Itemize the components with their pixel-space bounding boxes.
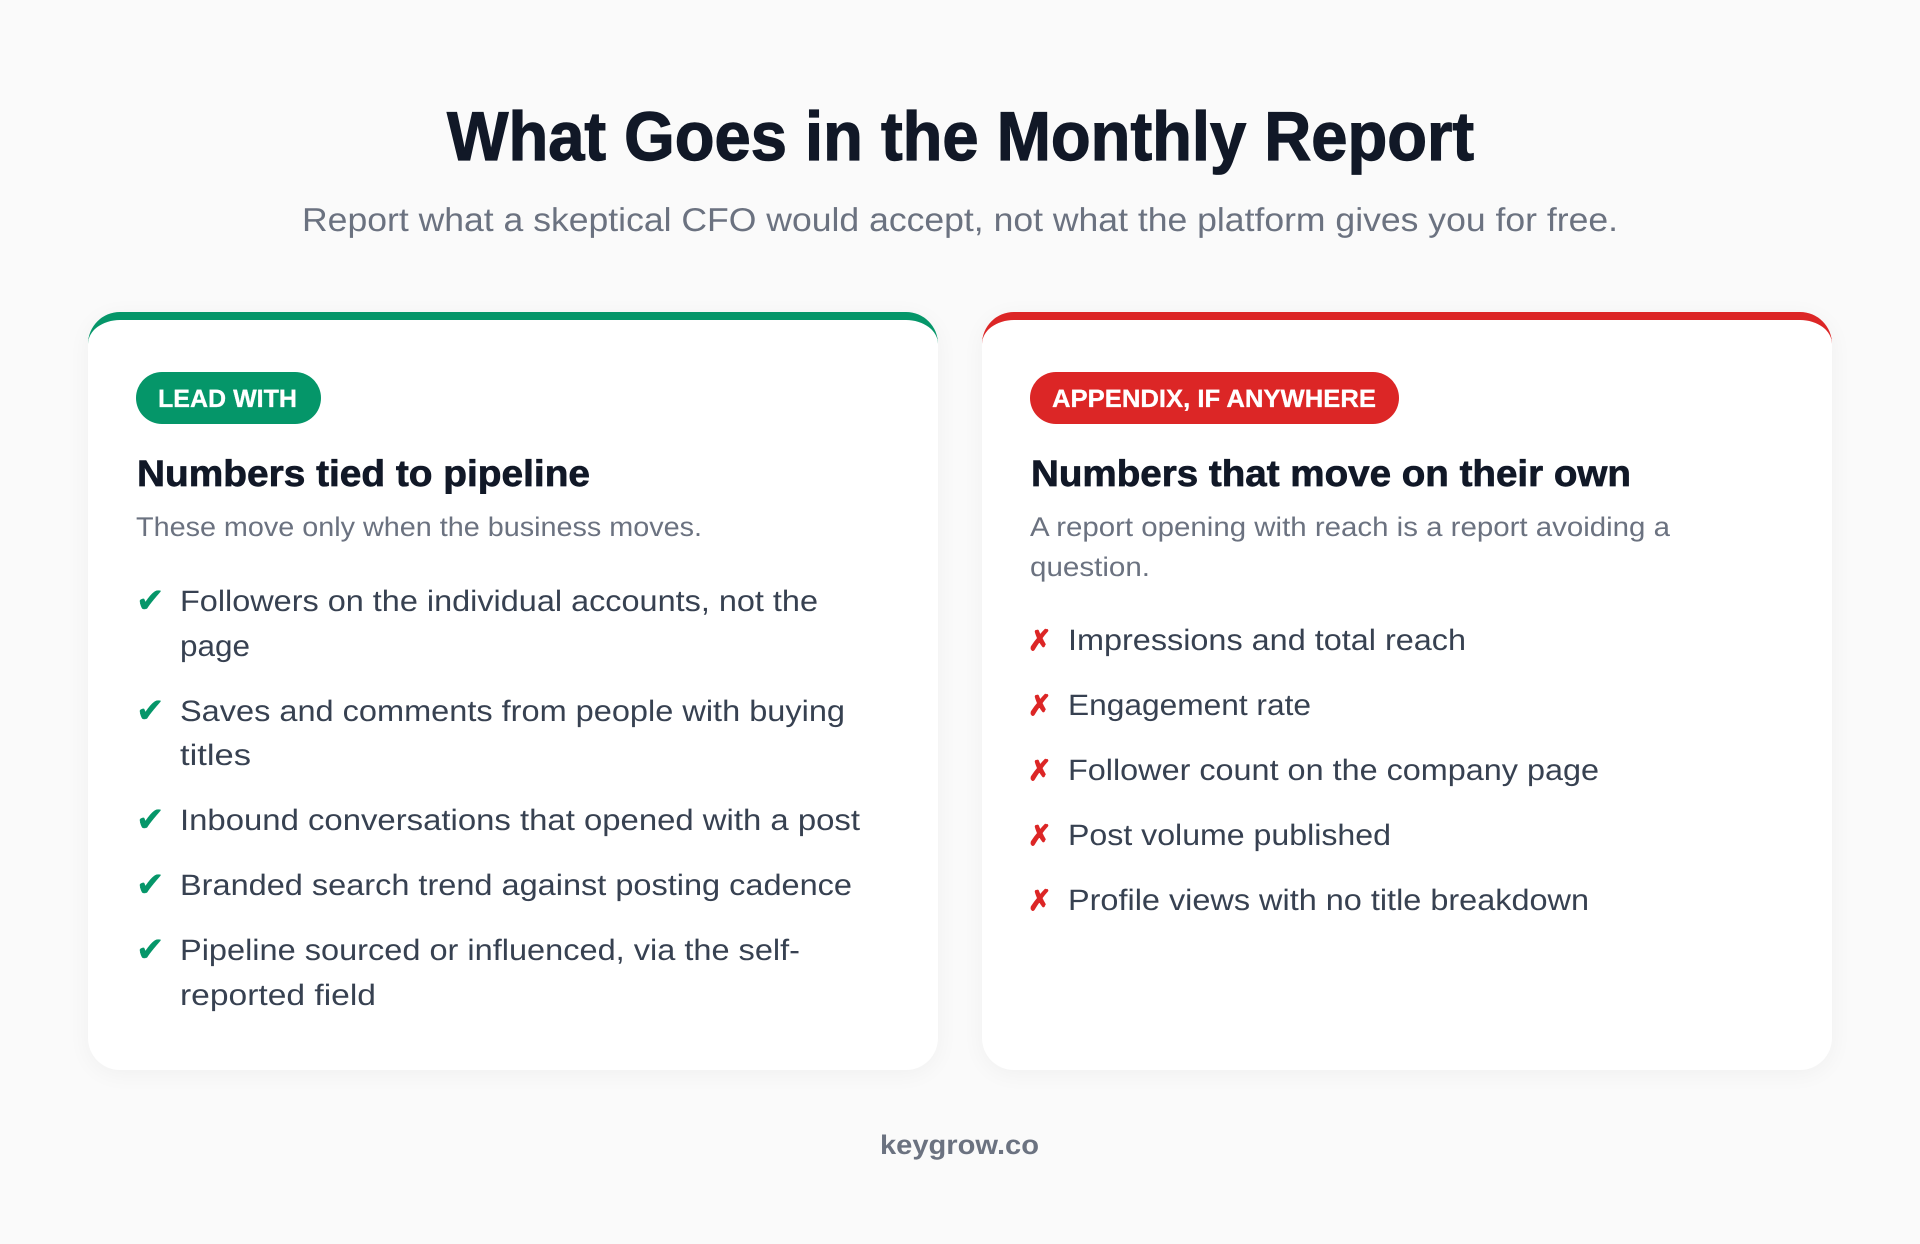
heading: numbers tied to pipeline: Numbers tied to pipeline xyxy=(137,453,590,494)
item: saves and comments xyxy=(136,691,845,772)
description xyxy=(1030,512,1671,582)
item: inbound conversations xyxy=(136,800,860,840)
item: engagement rate: Engagement rate xyxy=(1068,689,1311,722)
heading: numbers that move on their own: Numbers that move on their own xyxy=(1031,453,1631,494)
item: follower count: Follower count on the company page xyxy=(1068,754,1599,787)
item: pipeline sourced xyxy=(136,930,800,1012)
item: post volume: Post volume published xyxy=(1068,819,1391,852)
checklist xyxy=(136,581,860,1012)
item: branded search trend: Branded search trend against posting cadence xyxy=(180,869,852,902)
item: saves and comments: titles xyxy=(180,739,251,772)
description: question. xyxy=(1030,552,1150,582)
badge: appendix, if anywhere xyxy=(1030,372,1399,424)
cross list xyxy=(1028,624,1599,917)
item: followers on individual accounts xyxy=(136,581,818,663)
item: pipeline sourced: Pipeline sourced or influenced, via the self- xyxy=(180,934,800,967)
title: What Goes in the Monthly Report xyxy=(447,98,1474,175)
item: impressions: Impressions and total reach xyxy=(1068,624,1466,657)
item: saves and comments: ✔ xyxy=(136,691,164,731)
item: impressions: ✗ xyxy=(1028,624,1051,657)
description: A report opening with reach is a report avoiding a xyxy=(1030,512,1671,542)
item: profile views: Profile views with no title breakdown xyxy=(1068,884,1589,917)
item: engagement rate: ✗ xyxy=(1028,689,1051,722)
item: followers on individual accounts: ✔ xyxy=(136,581,164,621)
description: These move only when the business moves. xyxy=(136,512,702,542)
item: saves and comments: Saves and comments from people with buying xyxy=(180,695,845,728)
badge: appendix, if anywhere: APPENDIX, IF ANYWHERE xyxy=(1052,385,1376,413)
subtitle: Report what a skeptical CFO would accept, not what the platform gives you for free. xyxy=(302,201,1618,238)
item: branded search trend: ✔ xyxy=(136,865,164,905)
item: inbound conversations: Inbound conversations that opened with a post xyxy=(180,804,860,837)
item: pipeline sourced: ✔ xyxy=(136,930,164,970)
item: post volume: ✗ xyxy=(1028,819,1051,852)
item: inbound conversations: ✔ xyxy=(136,800,164,840)
badge: lead with xyxy=(136,372,321,424)
item: pipeline sourced: reported field xyxy=(180,979,376,1012)
footer: keygrow.co: keygrow.co xyxy=(880,1130,1039,1160)
item: followers on individual accounts: Followers on the individual accounts, not the xyxy=(180,585,818,618)
panel: appendix xyxy=(982,312,1832,1070)
item: follower count: ✗ xyxy=(1028,754,1051,787)
panel: lead with xyxy=(88,312,938,1070)
item: followers on individual accounts: page xyxy=(180,630,250,663)
badge: lead with: LEAD WITH xyxy=(158,385,297,413)
item: profile views: ✗ xyxy=(1028,884,1051,917)
